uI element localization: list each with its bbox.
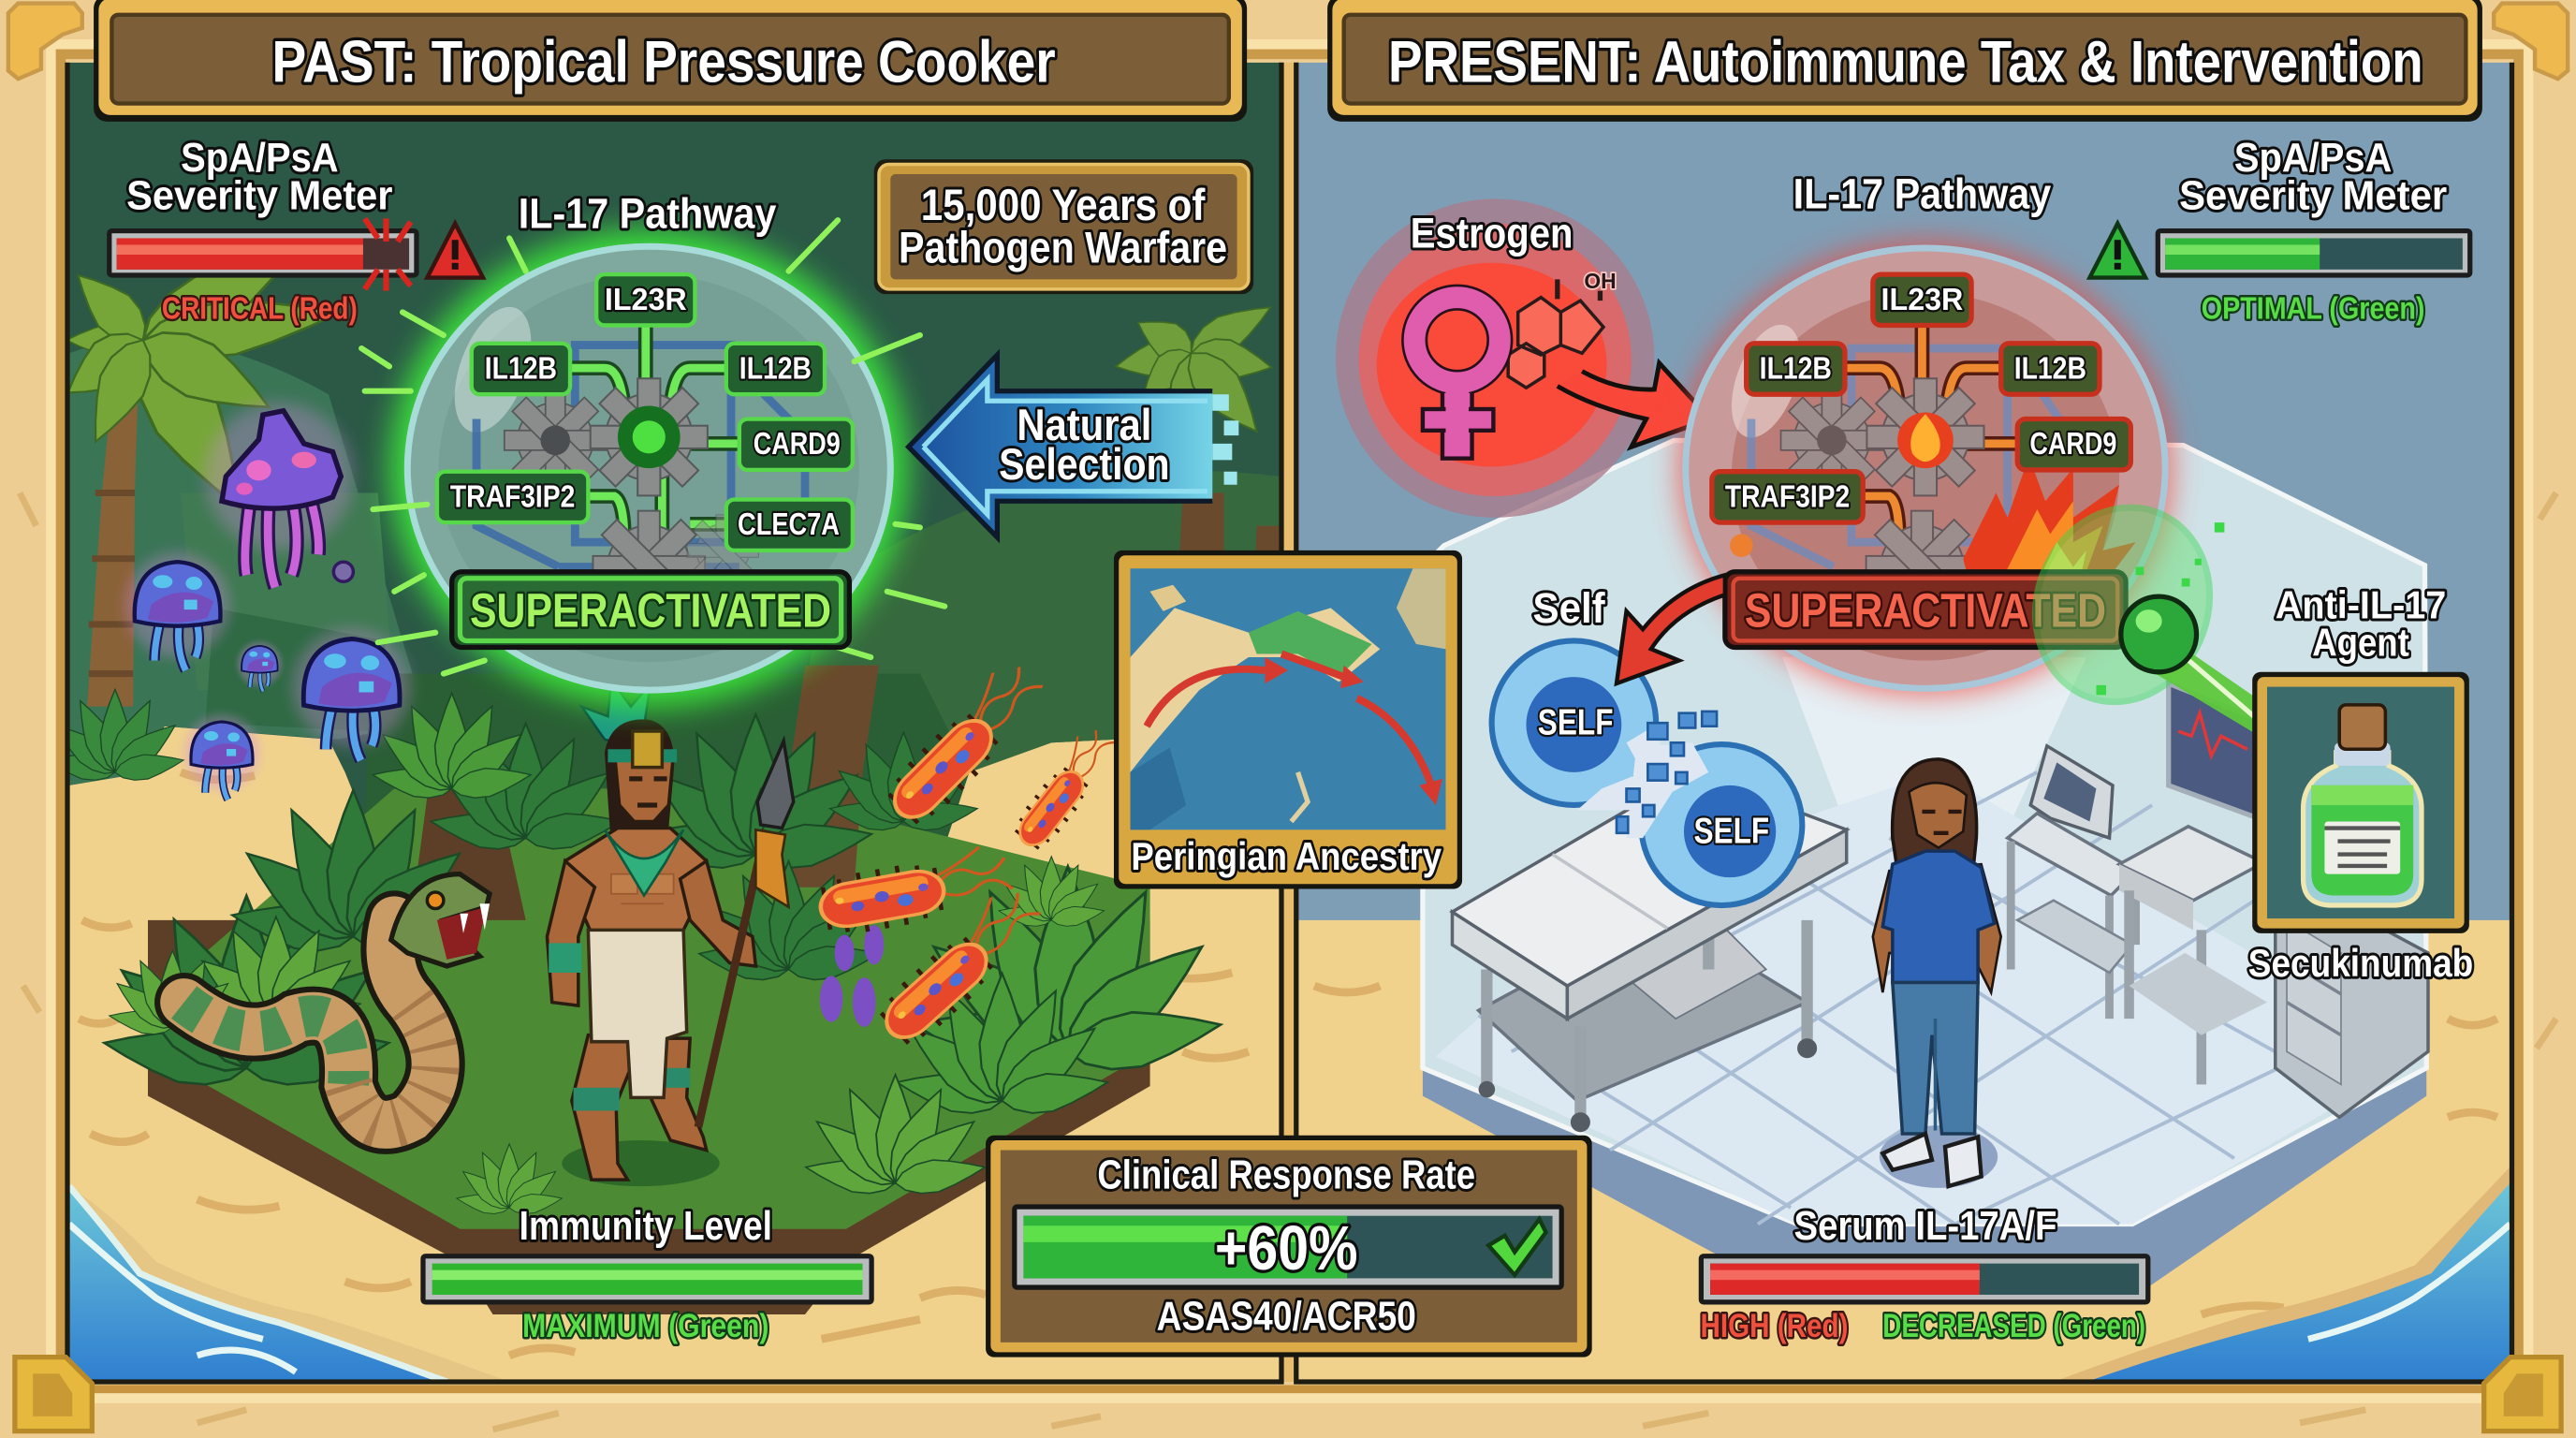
label IL12B left: IL12B (1760, 352, 1832, 387)
island grass (148, 788, 1150, 1229)
panel: clinical response (986, 1136, 1592, 1357)
meter title: Severity Meter (126, 172, 393, 218)
torso (565, 829, 707, 933)
heading: estrogen: Estrogen (1411, 210, 1573, 257)
meter title: SpA/PsA (2234, 135, 2392, 181)
corner: top left (8, 4, 82, 79)
icon: check mark (1488, 1219, 1546, 1275)
clinic floor (1436, 772, 2420, 1224)
small palm below sphere (411, 772, 526, 920)
snake (184, 874, 490, 1124)
corner: top right (2494, 4, 2568, 79)
headdress plumes (581, 681, 651, 746)
banner: present heading (1327, 0, 2482, 122)
immunity bar (420, 1254, 874, 1304)
label IL12B right: IL12B (739, 352, 812, 387)
superactivated banner (452, 572, 849, 647)
label TRAF3IP2 (1712, 472, 1863, 522)
icon: warning triangle (427, 224, 483, 278)
arrow: natural selection: Natural (1017, 401, 1151, 450)
immunity status: MAXIMUM (Green) (522, 1308, 768, 1344)
circuit lines (1847, 324, 2015, 542)
stool (2119, 827, 2267, 1084)
drug label: Agent (2312, 621, 2409, 665)
clinic walls (1423, 440, 2426, 1224)
severity meter: present (2089, 135, 2472, 326)
banner: past heading (94, 0, 1247, 122)
icon: warning triangle (2089, 224, 2145, 278)
circuit background (476, 345, 805, 566)
response value: +60% (1215, 1214, 1358, 1284)
map title: Peringian Ancestry (1131, 834, 1442, 878)
label TRAF3IP2: TRAF3IP2 (1725, 479, 1850, 514)
palm tree left (53, 228, 344, 707)
cell: self intact (1492, 640, 1662, 810)
meter bar (2156, 228, 2472, 278)
label TRAF3IP2: TRAF3IP2 (450, 479, 575, 514)
sand texture (79, 772, 1249, 1356)
pill trail highlight (2185, 657, 2254, 716)
label IL12B left (1747, 344, 1845, 394)
heading: IL-17 pathway present: IL-17 Pathway (1793, 170, 2052, 218)
sparkles (2096, 522, 2224, 695)
superactivated banner (1725, 572, 2126, 647)
immunity meter (420, 1203, 874, 1344)
heading: IL-17 pathway past: IL-17 Pathway (519, 190, 777, 238)
callout: pathogen warfare: 15,000 Years of (921, 181, 1206, 230)
jellyfish (124, 403, 411, 800)
warrior (547, 681, 794, 1186)
label IL12B right: IL12B (2014, 352, 2086, 387)
panel: drug vial (2252, 672, 2469, 933)
corner: bottom right (2484, 1357, 2561, 1431)
label IL12B right (2001, 344, 2100, 394)
serum status high: HIGH (Red) (1701, 1308, 1848, 1344)
label: self: Self (1532, 584, 1605, 632)
beach wave right (2054, 1167, 2510, 1382)
purple flowers (820, 925, 884, 1027)
meter status: CRITICAL (Red) (162, 291, 358, 326)
estrogen glow (1336, 198, 1654, 518)
molecule OH: OH (1584, 269, 1617, 293)
present backdrop (1298, 63, 2510, 920)
exam table (1453, 772, 1847, 1132)
arrow: natural selection (909, 355, 1238, 537)
label IL12B left (472, 344, 570, 394)
label IL23R (1873, 274, 1971, 325)
response title: Clinical Response Rate (1097, 1152, 1475, 1197)
anti-IL-17 pill (2009, 483, 2263, 733)
meter title: SpA/PsA (181, 135, 339, 181)
island soil base (148, 920, 1150, 1314)
shield glow (2009, 483, 2236, 726)
arrow: estrogen to pathway (1558, 363, 1710, 447)
ferns on island (100, 693, 1225, 1217)
cell fragments (1617, 712, 1717, 833)
bacteria (815, 655, 1123, 1053)
label CLEC7A (726, 500, 853, 550)
patient (1873, 759, 2001, 1188)
cabinet (2276, 871, 2428, 1117)
meter status: OPTIMAL (Green) (2202, 291, 2424, 326)
superactivated banner: SUPERACTIVATED (1745, 583, 2106, 637)
arrow: attack on self (1617, 575, 1725, 683)
meter title (2179, 135, 2447, 218)
clinic base (1423, 1051, 2426, 1298)
gears (1781, 378, 1984, 623)
spear (698, 829, 766, 1127)
jungle backdrop (69, 63, 1281, 920)
serum status decreased: DECREASED (Green) (1882, 1308, 2145, 1344)
circuit lines (572, 324, 738, 542)
serum title: Serum IL-17A/F (1794, 1203, 2056, 1249)
banner: past heading: PAST: Tropical Pressure Cooker (272, 30, 1056, 95)
migration arrows (1147, 654, 1432, 788)
label IL12B right (726, 344, 825, 394)
corner: bottom left (15, 1357, 92, 1431)
serum meter (1699, 1203, 2150, 1344)
meter title (126, 135, 393, 218)
label CARD9 (2017, 419, 2130, 470)
label CARD9 (739, 419, 853, 470)
label CARD9: CARD9 (2029, 427, 2116, 462)
response footnote: ASAS40/ACR50 (1157, 1293, 1416, 1339)
drug name: Secukinumab (2248, 941, 2473, 985)
label IL23R: IL23R (1881, 283, 1963, 317)
medical monitor (2169, 683, 2267, 822)
label IL12B left: IL12B (485, 352, 557, 387)
pathway sphere: past (361, 220, 944, 708)
drug label: Anti-IL-17 (2276, 582, 2446, 626)
estrogen signal (1336, 198, 1710, 518)
flames (1963, 457, 2136, 624)
label IL23R (596, 274, 695, 325)
equipment cart (2008, 746, 2136, 1019)
land mass (1131, 568, 1445, 829)
fern: left beach (44, 689, 185, 785)
tree trunk: centre (772, 666, 879, 888)
arms (547, 861, 594, 1005)
icon: molecule (1508, 279, 1603, 388)
legs (572, 1035, 644, 1180)
palm tree right (1113, 292, 1281, 731)
panel: map (1114, 550, 1462, 888)
loincloth (588, 930, 687, 1097)
frame streaks (20, 493, 2556, 1430)
callout: pathogen warfare (874, 159, 1253, 294)
severity meter: past (107, 135, 483, 326)
meter bar (107, 218, 419, 291)
energy spikes (361, 220, 944, 674)
label CLEC7A: CLEC7A (738, 507, 840, 542)
beach wave (69, 1186, 509, 1382)
callout: pathogen warfare: Pathogen Warfare (899, 224, 1227, 273)
pathway sphere: present (1679, 242, 2172, 695)
superactivated banner: SUPERACTIVATED (470, 583, 831, 637)
cell: self damaged: SELF (1693, 812, 1769, 852)
circuit background (1751, 348, 2070, 566)
serum bar (1699, 1254, 2150, 1304)
icon: female symbol (1414, 298, 1500, 459)
icon: vial (2304, 705, 2422, 905)
sand texture right (1314, 986, 2497, 1331)
label CARD9: CARD9 (754, 427, 841, 462)
label IL23R: IL23R (605, 283, 687, 317)
map arrow heads (1265, 657, 1442, 805)
pill (2121, 596, 2197, 672)
banner: present heading: PRESENT: Autoimmune Tax & Intervention (1388, 30, 2423, 95)
drug label (2276, 582, 2446, 665)
arrow: natural selection: Selection (999, 440, 1170, 490)
meter title: Severity Meter (2179, 172, 2447, 218)
pill trail (2156, 644, 2263, 733)
cell: self intact: SELF (1538, 703, 1613, 743)
cell: self damaged (1627, 742, 1802, 905)
immunity title: Immunity Level (520, 1203, 772, 1249)
gears (505, 378, 758, 623)
response bar (1012, 1204, 1564, 1290)
label TRAF3IP2 (437, 472, 588, 522)
